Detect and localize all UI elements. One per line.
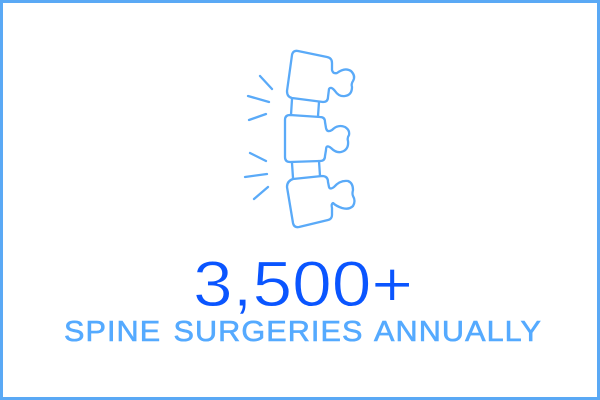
vertebra: bottom — [287, 176, 354, 227]
pain rays: upper left — [248, 76, 272, 120]
disc: lower — [292, 161, 320, 178]
pain rays: lower left — [245, 153, 268, 199]
disc: upper — [291, 99, 319, 116]
icon: spine — [245, 51, 354, 227]
subtitle: SPINE SURGERIES ANNUALLY — [64, 316, 542, 348]
vertebra: middle — [285, 115, 349, 162]
vertebra: top — [287, 51, 354, 102]
headline number: 3,500+ — [193, 248, 413, 320]
